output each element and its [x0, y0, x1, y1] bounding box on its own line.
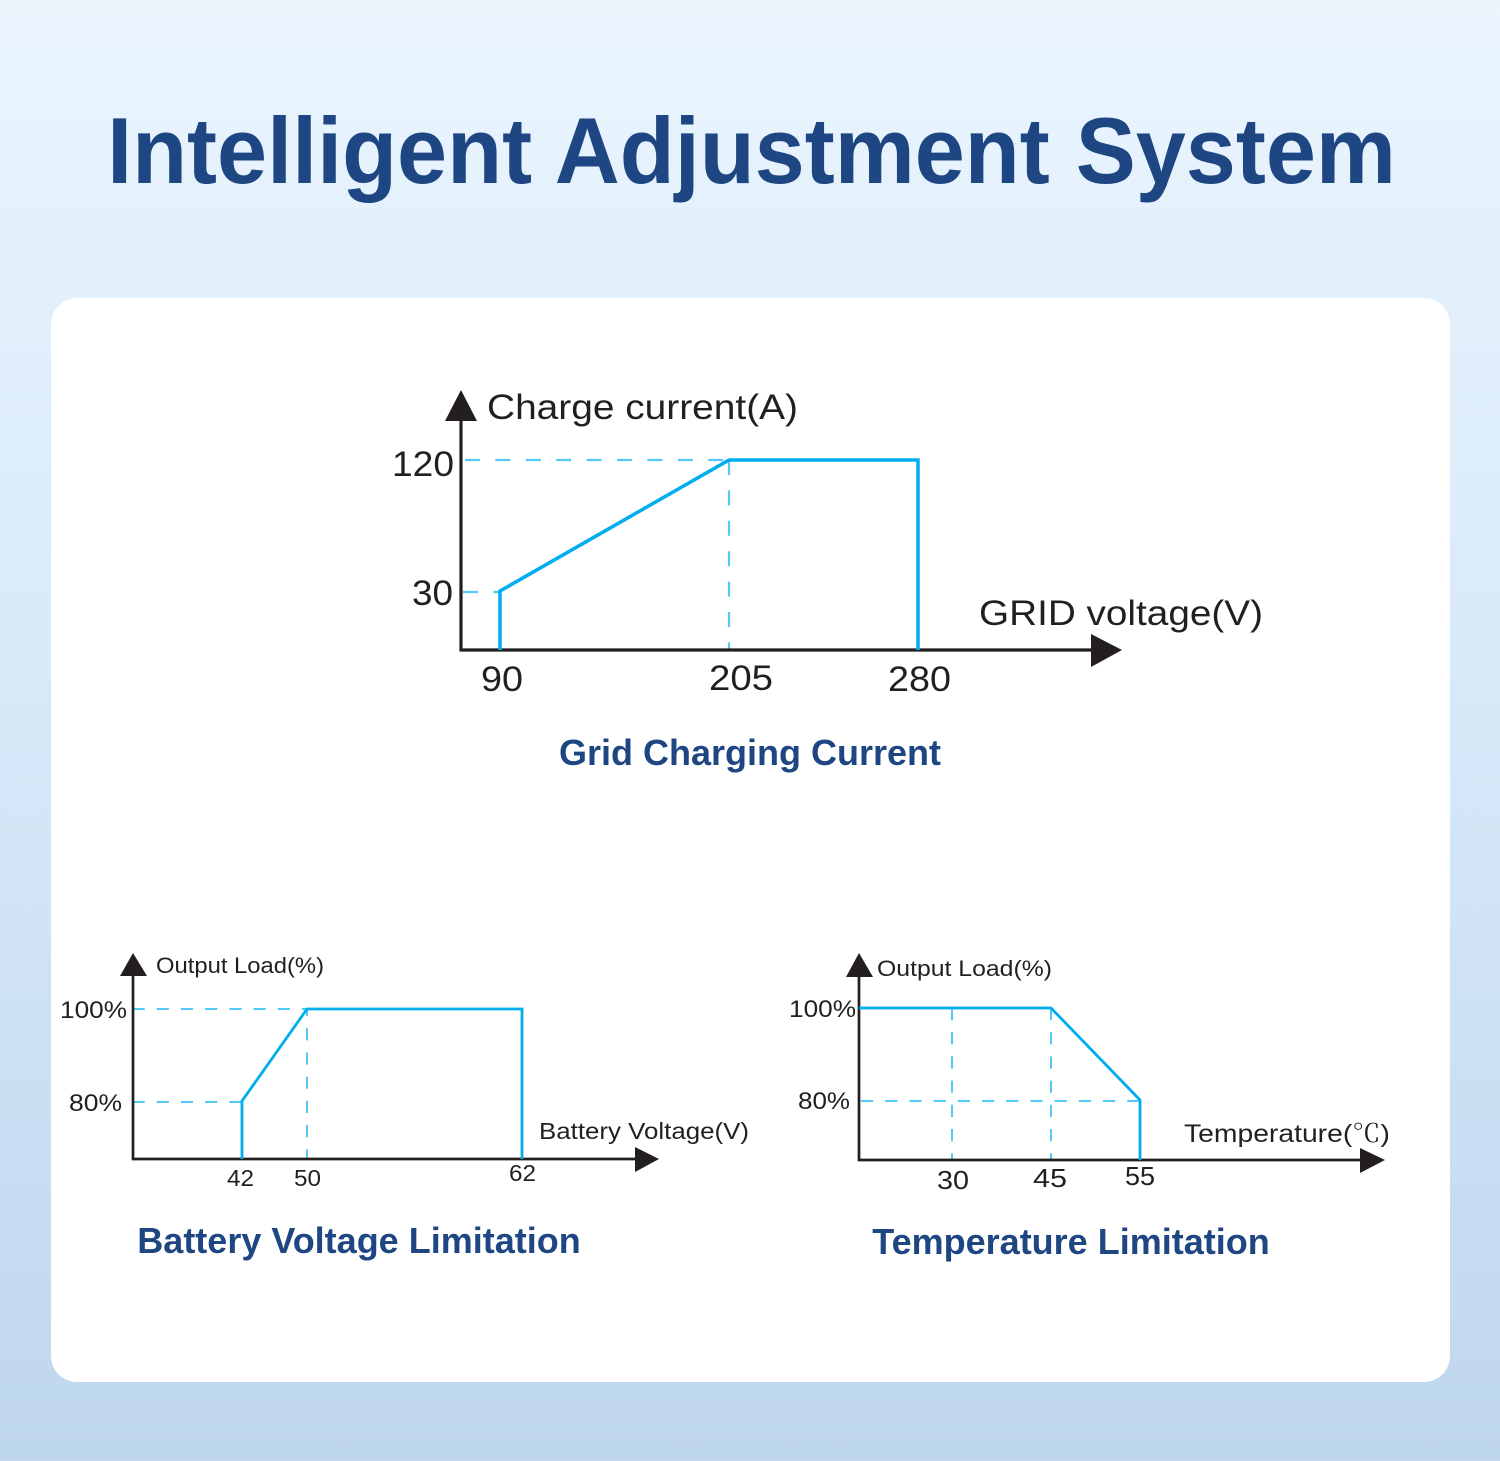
icon: y axis arrow	[120, 953, 147, 976]
chart: grid charging current	[392, 388, 1263, 699]
chart: temperature limitation: 55	[1125, 1161, 1155, 1191]
chart: battery voltage limitation: 80%	[69, 1090, 122, 1117]
heading: grid charging current: Grid Charging Current	[559, 732, 941, 773]
heading: temperature limitation: Temperature Limitation	[872, 1221, 1270, 1262]
icon: y axis arrow	[445, 390, 477, 421]
chart: temperature limitation: 30	[937, 1165, 969, 1195]
chart: battery voltage limitation: 62	[509, 1160, 536, 1186]
chart: grid charging current: 30	[412, 574, 453, 613]
chart: battery voltage limitation: 42	[227, 1165, 254, 1191]
chart: grid charging current: 205	[709, 659, 773, 698]
chart: temperature limitation: 45	[1033, 1163, 1067, 1193]
icon: x axis arrow	[1091, 634, 1122, 667]
chart: temperature limitation	[789, 953, 1390, 1195]
panel: white card	[51, 298, 1450, 1382]
chart: grid charging current: Charge current(A)	[487, 388, 798, 427]
chart: temperature limitation: 80%	[798, 1088, 850, 1115]
icon: y axis arrow	[846, 953, 873, 977]
chart: battery voltage limitation: 100%	[60, 997, 127, 1024]
chart: battery voltage limitation: 50	[294, 1165, 321, 1191]
chart: battery voltage limitation	[60, 953, 749, 1191]
chart: temperature limitation: Temperature( ℃)	[1184, 1114, 1390, 1150]
chart: grid charging current: GRID voltage(V)	[979, 594, 1263, 633]
icon: x axis arrow	[1360, 1148, 1385, 1173]
title: Intelligent Adjustment System	[107, 100, 1396, 204]
chart: battery voltage limitation: Battery Voltage(V)	[539, 1118, 749, 1144]
chart: grid charging current: 90	[481, 660, 523, 699]
chart: battery voltage limitation: Output Load(%)	[156, 953, 324, 978]
chart: temperature limitation: Output Load(%)	[877, 956, 1052, 981]
icon: x axis arrow	[635, 1147, 659, 1172]
heading: battery voltage limitation: Battery Voltage Limitation	[137, 1220, 581, 1261]
chart: grid charging current: 120	[392, 445, 454, 484]
chart: grid charging current: 280	[888, 660, 951, 699]
chart: temperature limitation: 100%	[789, 996, 856, 1023]
